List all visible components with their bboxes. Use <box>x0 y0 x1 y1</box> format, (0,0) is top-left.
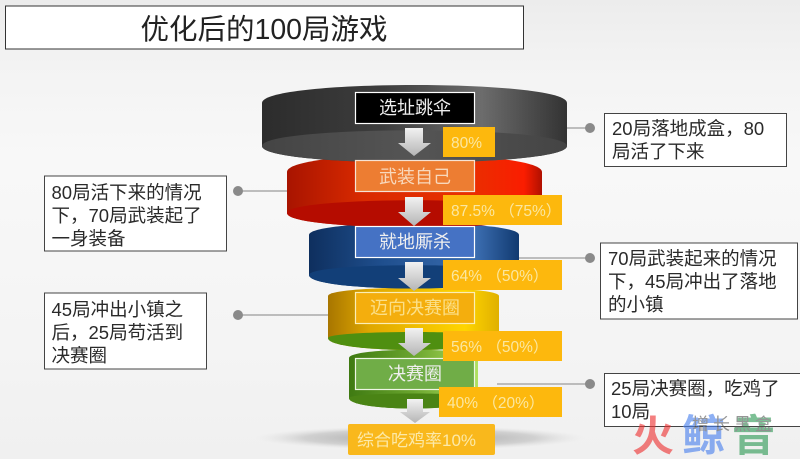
label: 迈向决赛圈 <box>356 292 474 324</box>
funnel layer: blue <box>309 223 519 288</box>
callout: 20局 <box>604 114 786 166</box>
callout: 80局: 80局活下来的情况 <box>52 182 202 203</box>
callout: 20局: 20局落地成盒，80 <box>612 118 764 139</box>
label: 武装自己: 武装自己 <box>379 167 451 187</box>
callout: 25局 <box>604 374 800 426</box>
overall win rate: 综合吃鸡率10% <box>357 431 476 450</box>
label: 迈向决赛圈: 迈向决赛圈 <box>370 298 460 318</box>
funnel layer: green <box>349 350 478 408</box>
callout: 45局: 决赛圈 <box>52 345 107 366</box>
label: 选址跳伞: 选址跳伞 <box>379 98 451 118</box>
callout: 80局: 一身装备 <box>52 228 126 249</box>
callout: 70局: 70局武装起来的情况 <box>608 248 777 269</box>
callout: 70局 <box>600 243 798 319</box>
arrows <box>398 128 431 423</box>
rate: 80%: 80% <box>451 135 482 152</box>
label: 决赛圈: 决赛圈 <box>388 364 442 384</box>
rate: 64%: 64% （50%） <box>451 268 548 285</box>
callout: 45局: 45局冲出小镇之 <box>52 299 183 320</box>
watermark: 火 <box>632 413 674 459</box>
label: 就地厮杀: 就地厮杀 <box>379 232 451 252</box>
rate: 64% <box>443 260 562 290</box>
rate: 40%: 40% （20%） <box>447 395 544 412</box>
callout: 45局 <box>44 293 206 369</box>
rate: 56% <box>443 331 562 361</box>
title <box>6 6 524 49</box>
rate: 40% <box>439 387 562 417</box>
funnel layer: red <box>287 155 542 227</box>
callout: 80局: 下，70局武装起了 <box>52 205 202 226</box>
stage labels <box>356 92 474 390</box>
callout: 20局: 局活了下来 <box>612 141 705 162</box>
title: 优化后的100局游戏 <box>140 14 388 46</box>
watermark: 增长黑盒 <box>692 415 776 434</box>
watermark <box>632 413 776 459</box>
rate: 87.5% <box>443 195 562 225</box>
funnel <box>262 85 567 408</box>
rate: 56%: 56% （50%） <box>451 339 548 356</box>
rate: 87.5%: 87.5% （75%） <box>451 203 561 220</box>
rate: 80% <box>443 127 495 157</box>
conversion rates <box>439 127 562 417</box>
callout: 70局: 的小镇 <box>608 294 664 315</box>
callout: 25局: 25局决赛圈，吃鸡了 <box>611 378 780 399</box>
label: 选址跳伞 <box>356 92 474 124</box>
ground shadow <box>255 426 585 450</box>
label: 就地厮杀 <box>356 226 474 258</box>
callout: 80局 <box>44 176 226 251</box>
funnel layer: black <box>262 85 567 162</box>
callout: 25局: 10局 <box>611 401 650 422</box>
funnel layer: yellow <box>328 288 499 350</box>
connector lines and dots <box>233 123 595 389</box>
callout: 45局: 后，25局苟活到 <box>52 322 183 343</box>
label: 决赛圈 <box>356 358 474 390</box>
callout: 70局: 下，45局冲出了落地 <box>608 271 777 292</box>
callouts <box>44 114 800 426</box>
label: 武装自己 <box>356 160 474 192</box>
overall win rate <box>348 424 495 455</box>
